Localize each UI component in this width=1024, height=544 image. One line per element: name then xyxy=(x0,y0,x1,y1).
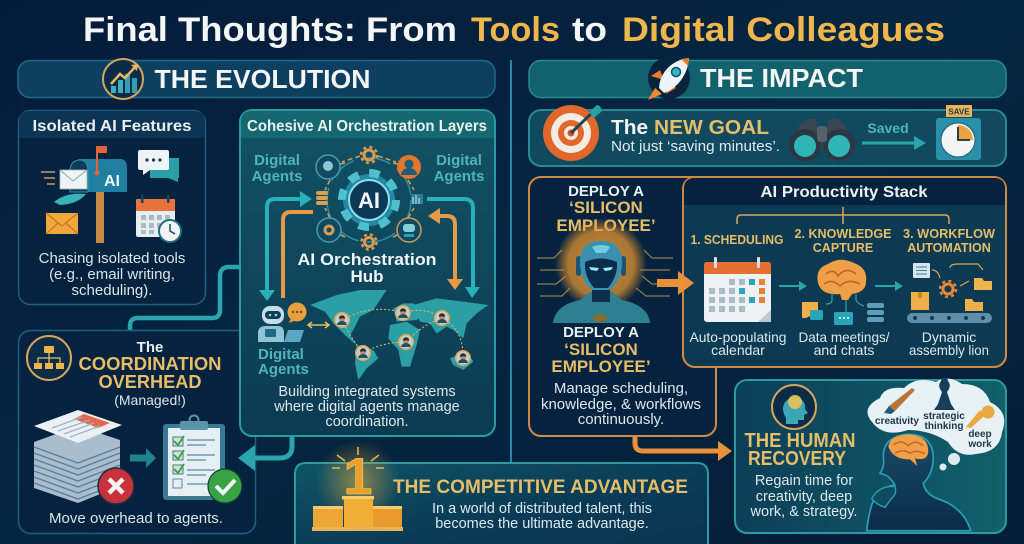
text: data meetings and chats: Data meetings/ xyxy=(798,329,890,345)
icon: AI hub gear xyxy=(316,147,423,250)
panel: the coordination overhead: (Managed!) xyxy=(114,392,186,408)
icon: podium with number 1: 1 xyxy=(344,448,372,506)
text: data meetings and chats: and chats xyxy=(814,342,874,358)
panel: the coordination overhead xyxy=(18,330,256,534)
title xyxy=(83,11,945,49)
section header: the evolution xyxy=(18,59,495,99)
title: to xyxy=(572,11,607,49)
arrowhead: to orchestration xyxy=(240,256,257,278)
text: manage scheduling: continuously. xyxy=(578,411,664,428)
label: digital agents right xyxy=(434,152,484,185)
arrow: teal left loop xyxy=(259,191,312,301)
text: deploy heading top: EMPLOYEE’ xyxy=(556,216,656,235)
text: the human recovery heading xyxy=(744,430,856,470)
icon: thought cloud xyxy=(868,378,1004,470)
icon: envelope xyxy=(46,213,78,234)
text: chasing isolated tools: Chasing isolated tools xyxy=(39,250,185,267)
text: building integrated systems: where digital agents manage xyxy=(273,399,460,415)
icon: gear node xyxy=(317,218,341,242)
text: dynamic assembly lion: assembly lion xyxy=(909,342,989,358)
text: strategic thinking: strategic xyxy=(923,411,965,422)
icon: binoculars xyxy=(789,119,855,161)
text: auto-populating calendar xyxy=(690,329,786,358)
icon: growth chart xyxy=(103,59,143,99)
icon: brain with data xyxy=(802,260,884,325)
text: manage scheduling: knowledge, & workflows xyxy=(541,396,701,413)
text: regain time: work, & strategy. xyxy=(750,504,857,520)
arrow: teal right loop xyxy=(427,199,480,298)
icon: small gear top xyxy=(361,147,377,163)
text: strategic thinking xyxy=(923,411,965,432)
icon: save clock: SAVE xyxy=(948,108,970,116)
icon: workflow conveyor xyxy=(907,263,992,323)
panel: the coordination overhead: COORDINATION xyxy=(78,354,222,374)
icon: mailbox: AI xyxy=(104,173,120,190)
title: Digital Colleagues xyxy=(622,11,945,49)
text: building integrated systems: Building integrated systems xyxy=(278,384,456,400)
text: AI orchestration hub: Hub xyxy=(350,267,384,286)
label: knowledge capture xyxy=(794,227,892,255)
text: creativity: creativity xyxy=(875,416,919,427)
panel: the human recovery xyxy=(735,378,1006,533)
text: deploy heading top: DEPLOY A xyxy=(568,183,644,200)
label: digital agents bottom xyxy=(258,346,309,378)
text: deep work: work xyxy=(967,439,992,450)
text: deploy heading bottom: EMPLOYEE’ xyxy=(551,357,651,376)
label: workflow automation: AUTOMATION xyxy=(907,241,991,255)
text: regain time: creativity, deep xyxy=(756,489,852,505)
panel: the coordination overhead: OVERHEAD xyxy=(98,372,202,392)
title: Tools xyxy=(471,11,560,49)
section header: the impact: THE IMPACT xyxy=(700,63,863,93)
text: manage scheduling: Manage scheduling, xyxy=(554,380,688,397)
icon: mailbox xyxy=(41,146,127,243)
text: distributed talent: In a world of distributed talent, this xyxy=(432,501,652,517)
icon: target xyxy=(543,105,602,161)
text: deep work: deep xyxy=(968,429,992,440)
arrow: silicon employee to stack xyxy=(657,271,694,295)
icon: thinking head xyxy=(867,434,971,531)
text: distributed talent xyxy=(432,501,652,532)
icon: person node xyxy=(397,155,421,179)
world map xyxy=(310,290,488,380)
text: building integrated systems: coordination. xyxy=(325,414,409,430)
label: digital agents left: Digital xyxy=(254,152,300,169)
arrow: isolated features to orchestration xyxy=(130,267,242,332)
label: scheduling: 1. SCHEDULING xyxy=(690,233,784,247)
panel: the new goal: Not just ‘saving minutes’. xyxy=(611,139,780,155)
text: distributed talent: becomes the ultimate advantage. xyxy=(435,516,649,532)
text: regain time xyxy=(750,473,857,520)
icon: mini chart xyxy=(411,194,423,204)
section header: the evolution: THE EVOLUTION xyxy=(154,64,370,94)
icon: chat bubbles xyxy=(138,150,179,182)
icon: database xyxy=(316,191,328,205)
bracket xyxy=(737,207,949,224)
icon: robot employee xyxy=(537,218,673,323)
section header: the impact xyxy=(529,57,1006,100)
arrow: paper to checklist xyxy=(130,448,156,468)
label: knowledge capture: 2. KNOWLEDGE xyxy=(794,227,892,241)
text: chasing isolated tools xyxy=(39,250,185,299)
text: deep work xyxy=(967,429,992,450)
text: deploy heading bottom: ‘SILICON xyxy=(564,340,638,359)
arrow: orchestration to coordination xyxy=(238,437,292,471)
panel: the new goal xyxy=(529,105,1006,166)
icon: key xyxy=(966,406,994,428)
text: regain time: Regain time for xyxy=(755,473,853,489)
panel: deploy a silicon employee xyxy=(529,177,716,436)
text: deploy heading top xyxy=(556,183,656,235)
icon: mind glow xyxy=(772,385,816,429)
text: chasing isolated tools: (e.g., email writing, xyxy=(49,266,175,283)
arrow: orange left loop xyxy=(283,212,313,298)
text: building integrated systems xyxy=(273,384,460,430)
panel: the competitive advantage: THE COMPETITIVE ADVANTAGE xyxy=(393,477,688,498)
icon: paintbrush xyxy=(884,388,915,414)
label: knowledge capture: CAPTURE xyxy=(813,241,873,255)
icon: robot agent xyxy=(258,302,306,342)
icon: clipboard checklist xyxy=(163,416,242,503)
arrow: orange right loop xyxy=(428,208,463,290)
panel: isolated AI features xyxy=(18,110,206,304)
icon: chess piece xyxy=(934,378,955,410)
panel: the competitive advantage xyxy=(295,440,708,544)
text: auto-populating calendar: Auto-populating xyxy=(690,329,786,345)
text: deploy heading top: ‘SILICON xyxy=(569,198,643,217)
panel: the new goal: The NEW GOAL xyxy=(611,117,769,139)
text: data meetings and chats xyxy=(798,329,890,358)
icon: small gear bottom xyxy=(362,234,376,250)
panel: cohesive AI orchestration layers xyxy=(240,110,495,436)
arrow: robot to map xyxy=(308,322,329,328)
panel: AI productivity stack: AI Productivity Stack xyxy=(760,184,928,201)
panel: the coordination overhead: The xyxy=(137,339,163,356)
text: deploy heading bottom: DEPLOY A xyxy=(563,324,639,341)
panel: cohesive AI orchestration layers: Cohesive AI Orchestration Layers xyxy=(247,118,487,135)
label: digital agents bottom: Digital xyxy=(258,346,304,363)
panel: the coordination overhead: Move overhead to agents. xyxy=(49,511,223,527)
text: the human recovery heading: RECOVERY xyxy=(748,448,847,470)
text: AI orchestration hub: AI Orchestration xyxy=(298,250,436,269)
divider xyxy=(510,60,512,462)
icon: agent node xyxy=(316,155,340,179)
icon: org chart xyxy=(27,336,71,380)
arrow: saved xyxy=(862,136,926,150)
label: workflow automation xyxy=(903,227,995,255)
text: chasing isolated tools: scheduling). xyxy=(72,282,152,299)
text: manage scheduling xyxy=(541,380,701,428)
title: Final Thoughts: From xyxy=(83,11,457,49)
panel: the new goal: Saved xyxy=(867,120,909,136)
panel: isolated AI features: Isolated AI Features xyxy=(32,118,192,135)
icon: AI hub gear: AI xyxy=(358,188,380,213)
text: AI orchestration hub xyxy=(298,250,436,286)
arrow: deploy to human recovery xyxy=(635,437,732,461)
label: digital agents bottom: Agents xyxy=(258,361,309,378)
text: the human recovery heading: THE HUMAN xyxy=(744,430,856,452)
arrow: knowledge to workflow xyxy=(875,281,903,291)
label: digital agents right: Digital xyxy=(436,152,482,169)
icon: rocket xyxy=(648,57,690,100)
label: workflow automation: 3. WORKFLOW xyxy=(903,227,995,241)
panel: AI productivity stack xyxy=(683,177,1006,367)
icon: save clock xyxy=(936,105,981,160)
arrow: scheduling to knowledge xyxy=(779,281,807,291)
text: dynamic assembly lion xyxy=(909,329,989,358)
icon: podium with number 1 xyxy=(312,440,403,531)
text: deploy heading bottom xyxy=(551,324,651,376)
text: auto-populating calendar: calendar xyxy=(711,342,765,358)
label: digital agents left xyxy=(252,152,302,185)
icon: calendar xyxy=(704,257,771,322)
text: strategic thinking: thinking xyxy=(925,421,963,432)
label: digital agents left: Agents xyxy=(252,168,302,185)
icon: calendar and clock xyxy=(136,195,181,242)
icon: robot node xyxy=(397,218,421,242)
icon: paper stack with x xyxy=(34,410,134,504)
label: digital agents right: Agents xyxy=(434,168,484,185)
text: dynamic assembly lion: Dynamic xyxy=(922,329,976,345)
